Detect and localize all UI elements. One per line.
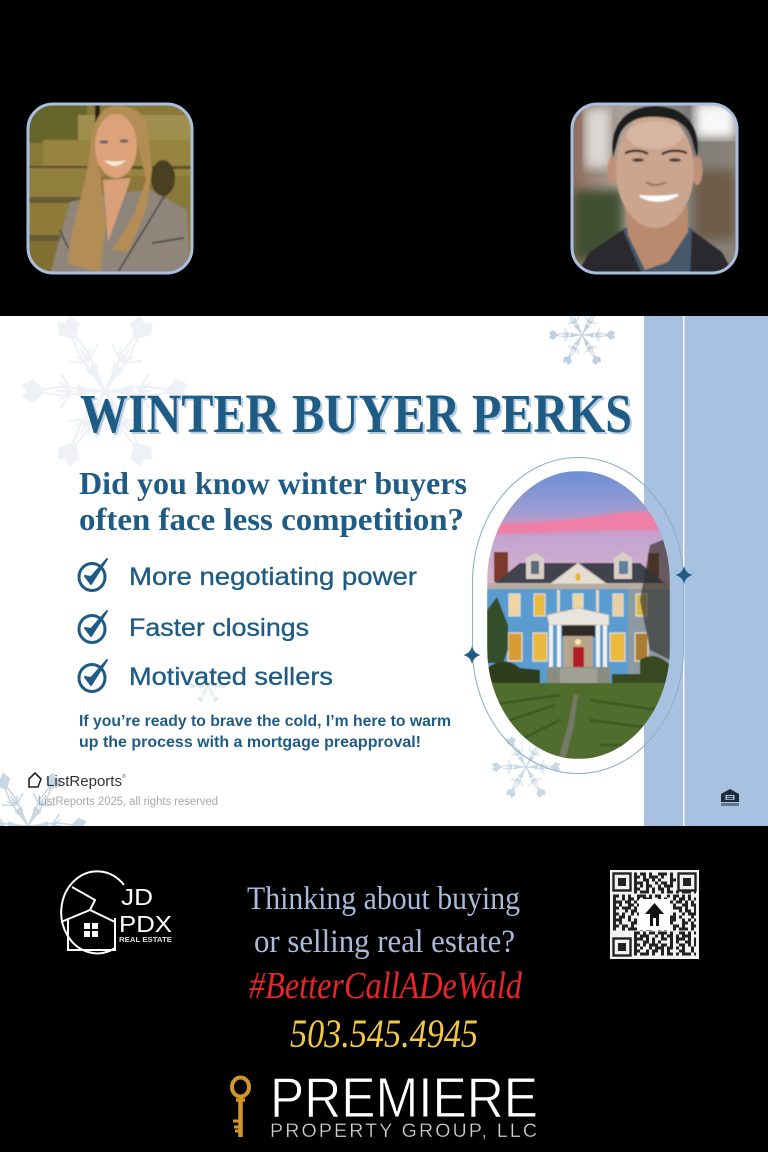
logo: JD PDX real estate: JD <box>121 884 153 910</box>
contact text: #BetterCallADeWald <box>249 965 523 1007</box>
snowflake: large top left <box>22 310 188 472</box>
logo: JD PDX real estate: PDX <box>119 911 172 937</box>
subheading <box>79 465 467 537</box>
logo: premiere property group: PREMIERE <box>270 1066 538 1130</box>
snowflake: bottom centre <box>492 734 560 800</box>
contact text <box>247 881 523 1056</box>
contact text: Thinking about buying <box>247 881 520 917</box>
portrait: woman <box>27 103 193 274</box>
house photo <box>487 471 670 759</box>
subheading: often face less competition? <box>79 501 464 537</box>
oval outline <box>472 458 684 774</box>
chimneys <box>494 552 508 582</box>
snowflake: top right <box>548 316 616 366</box>
logo: premiere property group: PROPERTY GROUP, LLC <box>270 1120 537 1142</box>
copyright: ListReports 2025, all rights reserved <box>38 796 218 808</box>
blue side band <box>644 316 768 826</box>
title: WINTER BUYER PERKS <box>80 383 632 444</box>
list: perks: Motivated sellers <box>129 663 333 691</box>
windows <box>508 594 648 661</box>
icon: check 2 <box>79 611 107 642</box>
contact text: 503.545.4945 <box>290 1011 478 1056</box>
list: perks: Faster closings <box>129 614 309 642</box>
listreports logo: ® <box>122 773 126 780</box>
icon: check 3 <box>79 660 107 692</box>
closing text: up the process with a mortgage preapproval! <box>79 734 421 751</box>
logo: JD PDX real estate <box>61 871 172 953</box>
logo: JD PDX real estate: REAL ESTATE <box>119 935 172 944</box>
dormers <box>526 553 544 579</box>
snowflake: small centre <box>190 669 226 703</box>
icon: diamond right <box>676 566 692 584</box>
subheading: Did you know winter buyers <box>79 465 467 501</box>
contact text: or selling real estate? <box>254 924 515 960</box>
list: perks <box>79 559 417 692</box>
closing text <box>79 713 451 751</box>
title: WINTER BUYER PERKS <box>82 385 634 446</box>
listreports logo: ListReports <box>46 774 122 790</box>
portico <box>562 625 595 637</box>
panel: winter buyer perks <box>0 316 768 826</box>
icon: diamond left <box>464 646 480 664</box>
closing text: If you’re ready to brave the cold, I’m here to warm <box>79 713 451 730</box>
portrait: man <box>571 103 738 274</box>
snowflake: bottom left <box>0 772 87 826</box>
QR code <box>610 870 699 959</box>
list: perks: More negotiating power <box>129 563 417 591</box>
icon: check 1 <box>79 559 107 590</box>
roof <box>495 563 665 583</box>
trees and shrubs <box>487 597 508 663</box>
icon: equal housing <box>721 789 739 806</box>
logo: key icon <box>232 1078 249 1137</box>
